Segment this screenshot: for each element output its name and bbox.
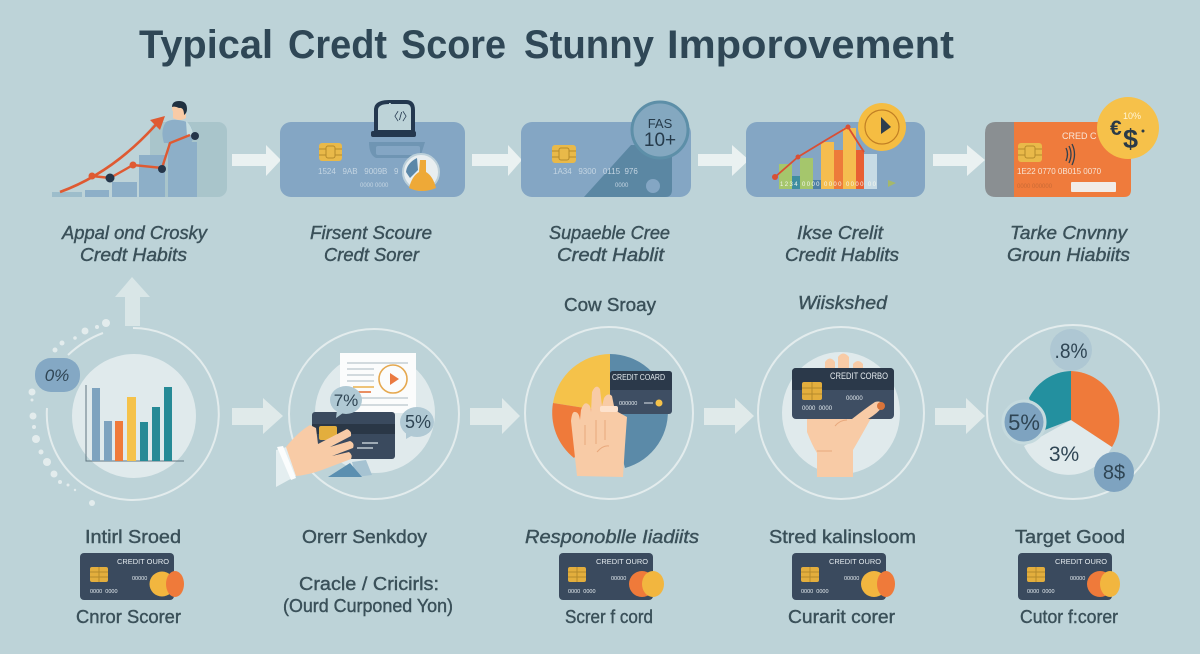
text: bottom note 2: Cracle / Cricirls: bbox=[299, 574, 439, 594]
panel: step 2 credit card: 〈/〉 bbox=[388, 110, 413, 123]
panel: step 1 growth chart icon bbox=[52, 101, 227, 197]
panel: step 4 card with bar chart: 1234 0000 0000 0000 00 bbox=[780, 182, 877, 188]
panel: target good pie circle bbox=[987, 325, 1159, 499]
title: Score bbox=[401, 23, 506, 67]
text: bottom heading 3: Responoblle Iiadiits bbox=[525, 527, 699, 547]
icon: small card 1: 0000 0000 bbox=[90, 589, 118, 595]
arrow: top 4 bbox=[933, 145, 985, 176]
panel: step 3 credit card with badge: 10+ bbox=[644, 130, 676, 151]
icon: small card 5 bbox=[1018, 553, 1120, 600]
callout: 7% bubble bbox=[330, 386, 362, 418]
panel: step 5 orange card with coin: 10% bbox=[1123, 111, 1141, 121]
text: bottom note 2: (Ourd Curponed Yon) bbox=[283, 596, 453, 616]
callout: 5% bubble: 5% bbox=[405, 412, 431, 432]
icon: small card 1: CREDIT OURO bbox=[117, 559, 170, 566]
text: top label 1 bbox=[61, 223, 208, 265]
text: top label 1: Credt Habits bbox=[80, 245, 187, 265]
icon: small card 4: CREDIT OURO bbox=[829, 559, 882, 566]
panel: responsible habits pie and hand bbox=[525, 327, 693, 499]
title bbox=[139, 23, 954, 67]
panel: step 5 orange card with coin: 1E22 0770 0B015 0070 bbox=[1017, 167, 1102, 176]
text: bottom heading 1: Intirl Sroed bbox=[85, 527, 181, 547]
panel: step 5 orange card with coin bbox=[985, 97, 1159, 197]
icon: small card 3: 00000 bbox=[611, 576, 626, 582]
panel: responsible habits pie and hand: 000000 bbox=[619, 401, 637, 407]
text: bottom note 2 bbox=[283, 574, 453, 616]
text: bottom caption 5: Cutor f:corer bbox=[1020, 607, 1118, 627]
panel: step 5 orange card with coin: CRED C bbox=[1062, 131, 1097, 141]
callout: 5% bubble bbox=[400, 407, 434, 439]
panel: step 4 card with bar chart bbox=[746, 103, 925, 197]
text: top label 2: Firsent Scoure bbox=[310, 223, 432, 243]
panel: card and document circle bbox=[276, 329, 459, 499]
icon: small card 1 bbox=[80, 553, 184, 600]
panel: step 3 credit card with badge: FAS bbox=[648, 116, 673, 131]
arrow: top 2 bbox=[472, 145, 522, 176]
title: Stunny bbox=[524, 23, 655, 67]
panel: target good pie circle: 3% bbox=[1049, 443, 1079, 466]
panel: hand holding card circle: 00000 bbox=[846, 396, 863, 402]
panel: step 2 credit card bbox=[280, 102, 465, 197]
panel: step 3 credit card with badge: 0000 bbox=[615, 183, 629, 189]
panel: step 3 credit card with badge: 1A34 9300 0115 976 bbox=[553, 167, 638, 176]
arrow: bottom 2 bbox=[470, 398, 520, 434]
panel: hand holding card circle: 0000 0000 bbox=[802, 406, 833, 412]
panel: responsible habits pie and hand: CREDIT COARD bbox=[612, 373, 665, 382]
arrow: bottom 1 bbox=[232, 398, 283, 434]
title: Imporovement bbox=[667, 23, 954, 67]
text: top label 3 bbox=[549, 223, 670, 265]
panel: step 3 credit card with badge bbox=[521, 102, 691, 197]
icon: small card 5: CREDIT OURO bbox=[1055, 559, 1108, 566]
icon: small card 4 bbox=[792, 553, 895, 600]
panel: target good pie circle: 5% bbox=[1008, 410, 1040, 435]
icon: small card 5: 00000 bbox=[1070, 576, 1085, 582]
text: top label 5 bbox=[1007, 223, 1130, 265]
text: bottom heading 2: Orerr Senkdoy bbox=[302, 527, 427, 547]
text: top label 5: Groun Hiabiits bbox=[1007, 245, 1130, 265]
callout: 7% bubble: 7% bbox=[334, 391, 358, 410]
panel: step 5 orange card with coin: 0000 000000 bbox=[1017, 184, 1053, 190]
icon: small card 3: CREDIT OURO bbox=[596, 559, 649, 566]
icon: small card 1: 00000 bbox=[132, 576, 147, 582]
panel: step 5 orange card with coin: € bbox=[1110, 117, 1122, 140]
text: top label 2 bbox=[310, 223, 432, 265]
panel: step 2 credit card: 1524 9AB 9009B 9 bbox=[318, 167, 399, 176]
icon: small card 4: 00000 bbox=[844, 576, 859, 582]
panel: hand holding card circle: CREDIT CORBO bbox=[830, 371, 888, 381]
text: bottom caption 1: Cnror Scorer bbox=[76, 607, 181, 627]
text: middle heading cow: Cow Sroay bbox=[564, 295, 656, 315]
panel: initial score bar chart circle bbox=[28, 319, 219, 506]
text: top label 4: Ikse Crelit bbox=[797, 223, 884, 243]
icon: small card 4: 0000 0000 bbox=[801, 589, 829, 595]
text: bottom heading 4: Stred kalinsloom bbox=[769, 527, 916, 547]
text: bottom heading 5: Target Good bbox=[1015, 527, 1125, 547]
arrow: top 3 bbox=[698, 145, 749, 176]
arrow: top 1 bbox=[232, 145, 281, 176]
icon: small card 3 bbox=[559, 553, 664, 600]
text: top label 4 bbox=[785, 223, 899, 265]
panel: step 2 credit card: 0000 0000 bbox=[360, 183, 389, 189]
title: Credt bbox=[288, 23, 387, 67]
panel: step 5 orange card with coin: $ bbox=[1123, 124, 1138, 154]
icon: small card 5: 0000 0000 bbox=[1027, 589, 1055, 595]
panel: initial score bar chart circle: 0% bbox=[45, 366, 69, 385]
panel: target good pie circle: 8$ bbox=[1103, 462, 1125, 484]
arrow: bottom 3 bbox=[704, 398, 754, 434]
title: Typical bbox=[139, 23, 273, 67]
arrow: bottom 4 bbox=[935, 398, 985, 434]
arrow: up bbox=[115, 277, 150, 326]
text: bottom caption 3: Screr f cord bbox=[565, 607, 653, 627]
icon: small card 3: 0000 0000 bbox=[568, 589, 596, 595]
panel: target good pie circle: .8% bbox=[1054, 340, 1088, 363]
text: middle heading wiiskshed: Wiiskshed bbox=[798, 293, 888, 313]
text: bottom caption 4: Curarit corer bbox=[788, 607, 895, 627]
text: top label 5: Tarke Cnvnny bbox=[1010, 223, 1128, 243]
text: top label 3: Credt Hablit bbox=[557, 245, 665, 265]
text: top label 4: Credit Hablits bbox=[785, 245, 899, 265]
text: top label 2: Credt Sorer bbox=[324, 245, 420, 265]
text: top label 3: Supaeble Cree bbox=[549, 223, 670, 243]
panel: hand holding card circle bbox=[758, 327, 924, 499]
text: top label 1: Appal ond Crosky bbox=[61, 223, 208, 243]
